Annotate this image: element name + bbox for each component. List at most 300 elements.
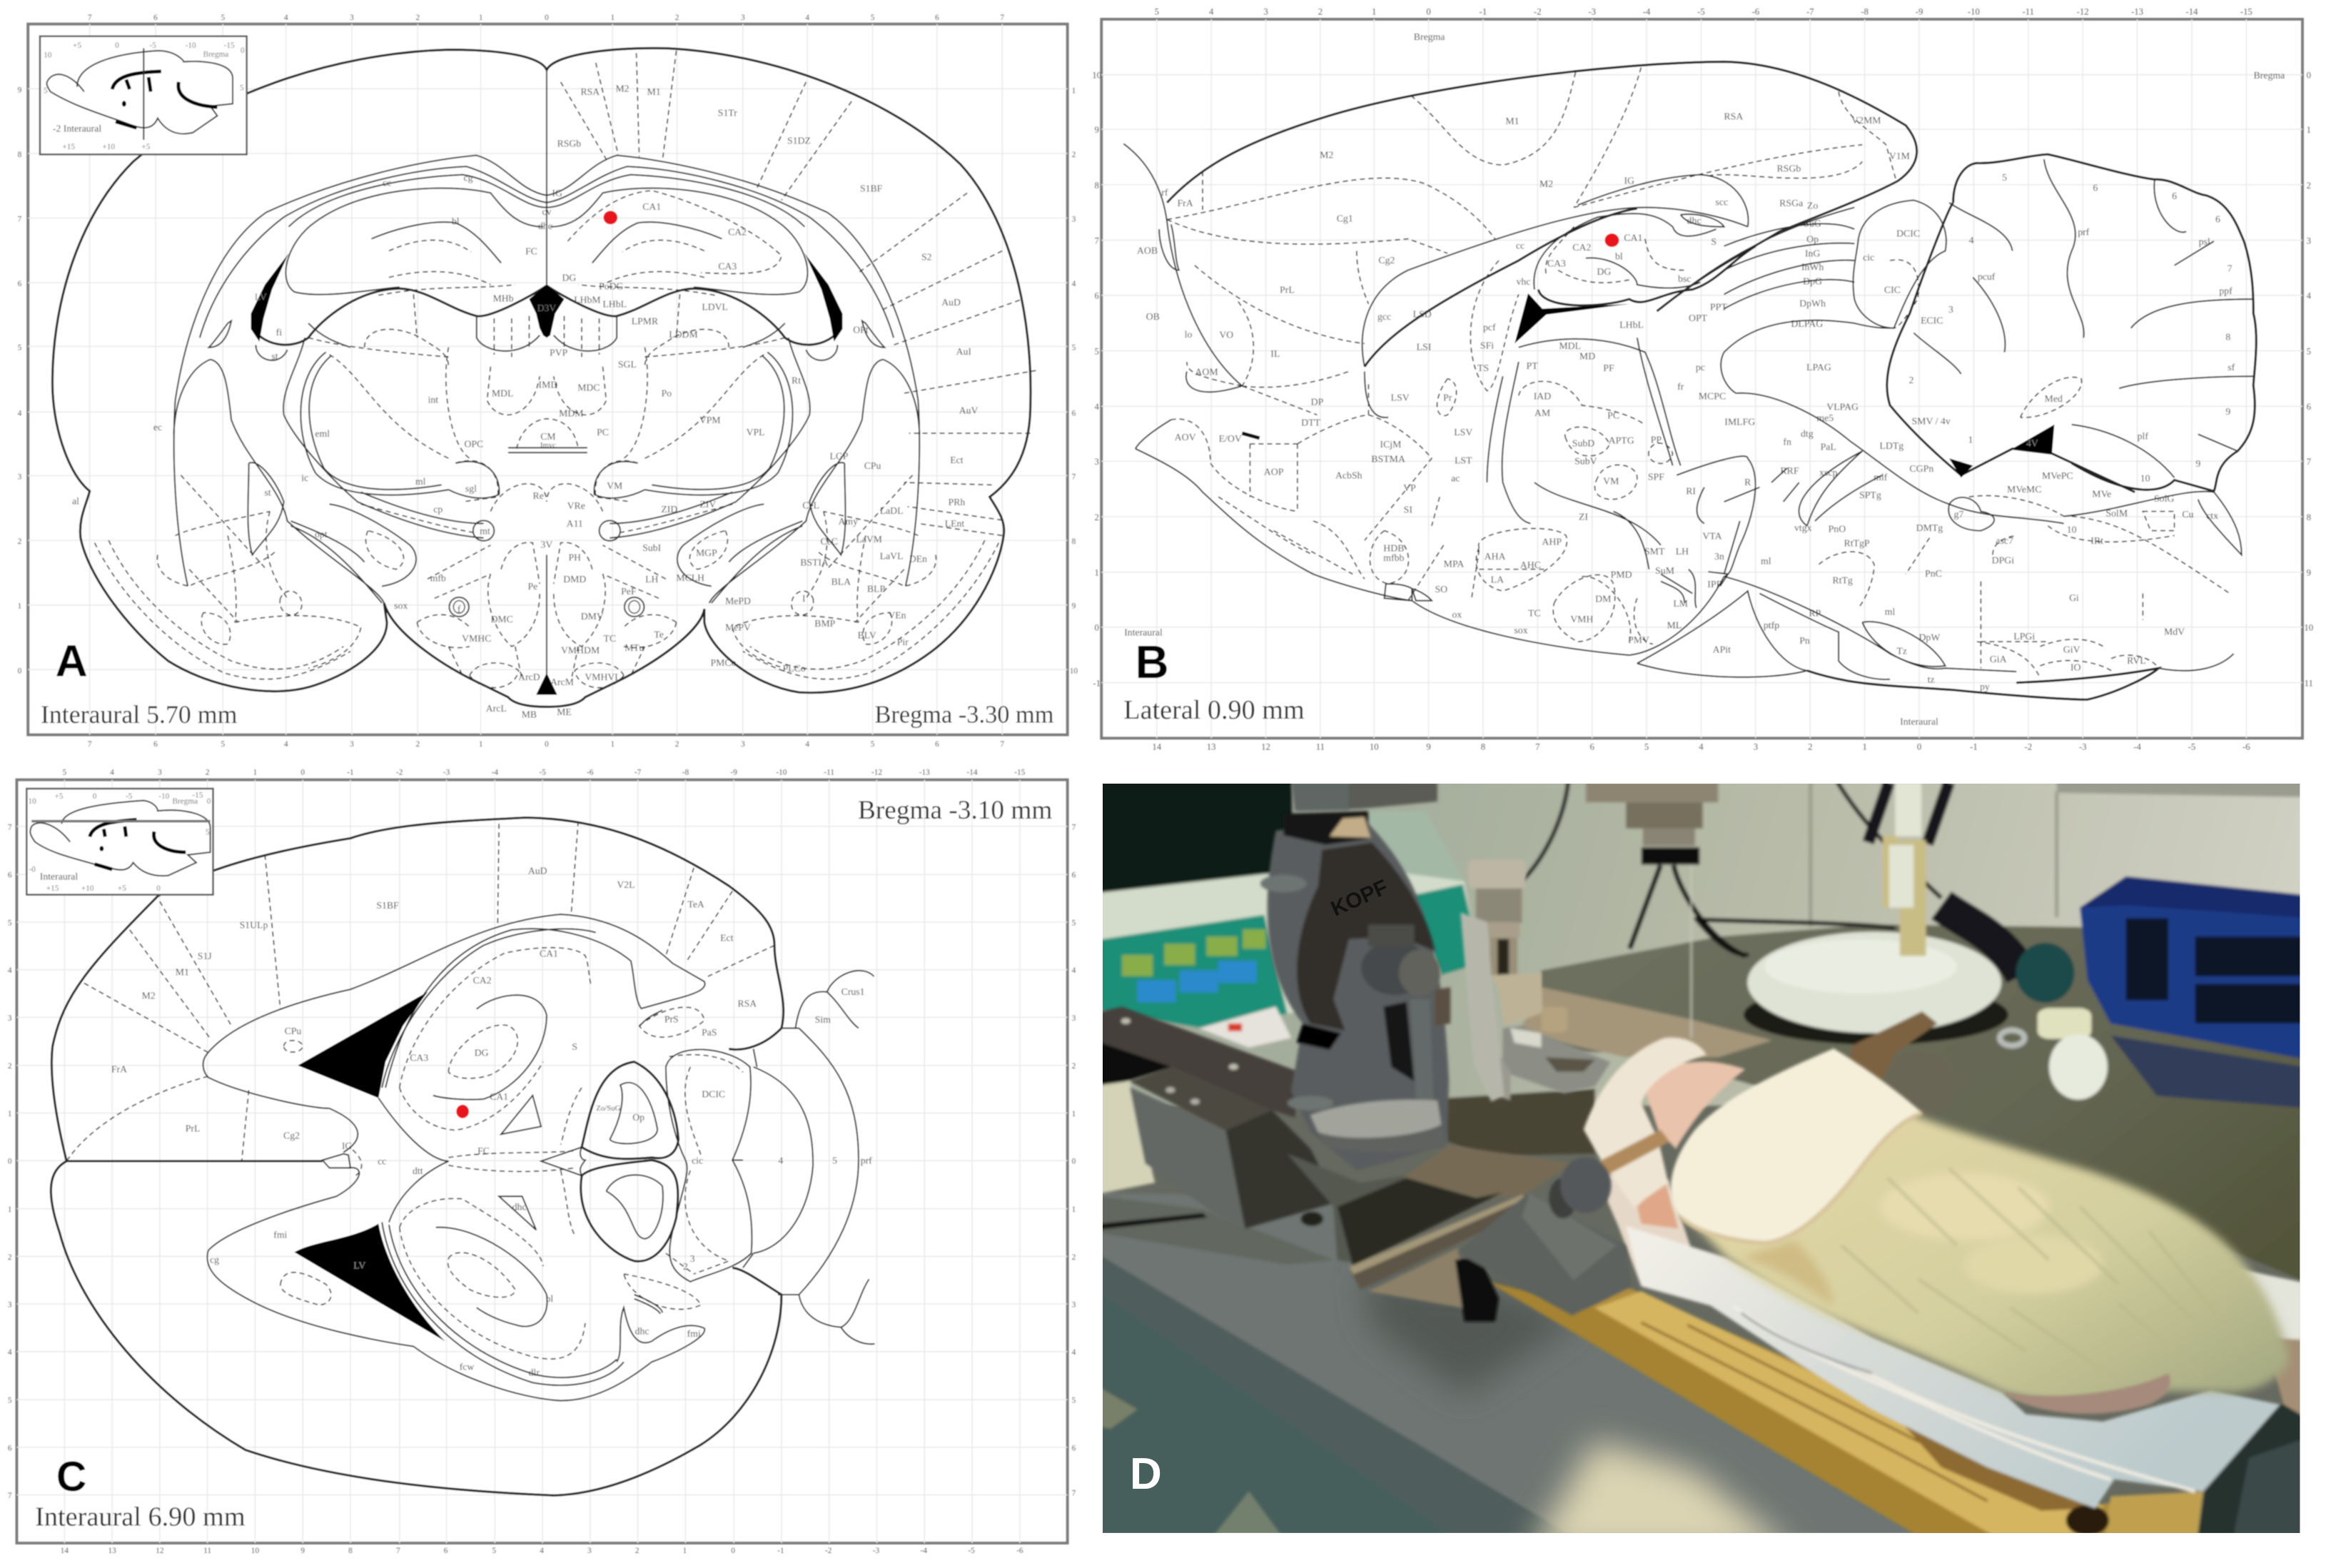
structure labels B [1124,31,2285,727]
panel B axis numbers [1092,6,2313,752]
inset: sagittal locator A: +5 [73,41,81,50]
structure labels C: IG [342,1140,352,1151]
structure labels C: DCIC [702,1089,725,1100]
white tissue by head [1595,1173,1711,1305]
panel B axis numbers: 10 [1092,71,1101,81]
panel B axis numbers: 8 [1481,742,1485,752]
structure labels B: Med [2045,393,2063,404]
panel B axis numbers: -14 [2185,6,2198,16]
structure labels B: GiA [1990,654,2007,664]
bench surface [1534,924,2331,1294]
structure labels C: Crus1 [841,986,865,997]
structure labels B: V2MM [1851,115,1881,126]
panel C axis numbers: 5 [63,768,67,777]
structure labels B: DTT [1301,418,1321,428]
panel C axis numbers: 7 [8,1492,12,1500]
structure labels B: 3n [1714,551,1724,562]
structure labels A: VRe [567,500,585,511]
micrometer [1460,859,1567,1102]
panel C axis numbers: 2 [1072,1253,1076,1262]
structure labels C: Cg2 [283,1131,300,1141]
structure labels C: cic [692,1155,703,1165]
blue tube rack [2080,876,2331,1111]
structure labels A: S1Tr [718,107,737,118]
panel B axis numbers: 4 [2307,291,2312,301]
structure labels B: vhc [1516,276,1530,287]
panel C axis numbers: -12 [871,768,882,777]
structure labels A: MB [522,709,537,719]
table band [1087,1248,1603,1554]
structure labels A: cp [433,504,443,515]
inset: sagittal locator A: 0 [241,46,245,55]
structure labels B: RSA [1724,111,1743,121]
structure labels B: ECIC [1921,315,1943,325]
panel A axis numbers: 7 [88,14,92,22]
inset: sagittal locator A [40,36,247,154]
panel C axis numbers: 5 [8,1397,12,1405]
structure labels B: AcbSh [1335,470,1362,480]
panel B axis numbers: -2 [2024,742,2032,752]
panel C axis numbers: 9 [300,1547,305,1555]
structure labels A: PoDG [599,281,624,292]
structure labels B: AHC [1520,560,1541,570]
plate upper surface [1087,1195,1333,1265]
structure labels B: LDTg [1879,440,1903,451]
injection site marker A [604,211,617,224]
panel B axis numbers: 4 [1209,6,1214,16]
structure labels C: cg [210,1255,219,1265]
dorsal third ventricle [529,285,565,338]
panel B axis numbers: 6 [2307,402,2311,412]
central junction C [541,1147,585,1175]
panel B: sagittal atlas section [1092,6,2313,752]
panel B axis numbers: -1 [1480,6,1487,16]
inset: sagittal locator C: -5 [126,792,133,801]
structure labels B: AHP [1542,537,1562,547]
structure labels B: OB [1146,311,1160,322]
panel A axis numbers: 9 [1072,602,1076,611]
structure labels B: ac [1451,472,1460,483]
structure labels A: D3V [537,303,556,313]
panel A axis numbers: 4 [284,14,288,22]
panel A axis numbers: 0 [545,14,549,22]
structure labels A: FC [525,246,537,256]
panel C axis numbers: -1 [777,1547,784,1555]
panel A axis numbers: 7 [1072,473,1076,482]
panel A axis numbers: 10 [1070,667,1078,675]
panel C axis numbers: 3 [1072,1300,1076,1309]
structure labels B: DP [1311,397,1324,408]
structure labels B: 9 [2225,406,2230,417]
structure labels B: MD [1579,350,1595,361]
structure labels B: AHA [1485,551,1506,562]
panel A axis numbers: 3 [741,14,745,22]
panel B axis numbers: 9 [1094,125,1099,135]
structure labels B: DM [1595,593,1611,604]
structure labels B: IPF [1707,579,1722,590]
structure labels B: PnO [1829,523,1846,534]
structure labels A: Imvc [540,441,556,450]
colliculi C [581,1049,752,1282]
structure labels B: Gi [2069,592,2079,603]
panel B axis numbers: -5 [1697,6,1705,16]
panel C axis numbers: 2 [8,1253,12,1262]
panel A axis numbers: 7 [1000,740,1004,749]
panel C axis numbers: 6 [8,871,12,880]
glass dish and clamp arm [1849,1011,1953,1116]
structure labels C: Ect [720,933,734,944]
panel B axis numbers: 5 [1644,742,1649,752]
structure labels B: 2 [1908,375,1913,385]
structure labels B: IAD [1534,390,1551,401]
panel C axis numbers: 4 [8,966,12,975]
structure labels B: MCPC [1699,390,1726,401]
structure labels C: S1J [198,951,212,961]
structure labels C: PrS [664,1013,679,1024]
panel A axis numbers: 1 [18,602,21,611]
structure labels B: sox [1514,624,1528,635]
structure labels B: scc [1715,197,1728,208]
structure labels A: LGP [829,451,849,462]
structure labels A: OPt [853,324,869,335]
panel C axis numbers: -7 [634,768,642,777]
panel B axis numbers: -9 [1916,6,1923,16]
structure labels B: R [1744,477,1751,487]
structure labels A: DMD [563,574,586,585]
structure labels B: tz [1928,674,1935,684]
structure labels B: Interaural [1900,717,1938,727]
structure labels B: RRF [1780,465,1799,476]
structure labels B: LSD [1413,309,1432,320]
structure labels B: 3 [1948,304,1953,315]
panel B axis numbers: 5 [2307,346,2311,356]
structure labels B: ptfp [1764,620,1779,631]
structure labels B: DG [1597,266,1611,277]
structure labels A: Amy [838,516,858,527]
panel B axis numbers: 8 [2307,512,2311,522]
panel C axis numbers: 12 [156,1547,164,1555]
structure labels A: cc [383,177,391,188]
structure labels B: LSI [1417,341,1432,353]
structure labels B: CA2 [1572,242,1591,253]
ear bar rail [1087,1006,1299,1118]
inset: sagittal locator C: Interaural [40,871,78,881]
panel C axis numbers: 1 [8,1205,12,1214]
panel B axis numbers: -15 [2240,6,2252,16]
structure labels B: asc7 [1996,535,2013,546]
structure labels B: 6 [2215,213,2220,224]
structure labels B: APTG [1609,435,1634,446]
structure labels A: cv [542,206,552,217]
structure labels A: Pe [527,581,537,592]
structure labels B: 7 [2228,263,2233,273]
inset: sagittal locator A: 5 [240,84,244,93]
panel A axis numbers: 4 [284,740,288,749]
structure labels C: TeA [687,899,704,909]
structure labels A: ic [301,472,308,483]
structure labels A: f [457,604,461,614]
structure labels B: Cg2 [1378,255,1395,265]
structure labels A: CeL [802,500,819,511]
structure labels A: MHb [493,293,514,304]
cortical area boundaries B [1167,68,1896,415]
structure labels B: gcc [1377,311,1391,322]
structure labels A: Po [662,388,672,399]
structure labels C: prf [861,1155,872,1165]
structure labels B: MVePC [2042,470,2073,481]
structure labels A: RSGb [557,138,581,149]
cortical area boundaries C [84,821,774,1160]
structure labels A: bl [452,216,460,226]
panel C axis numbers: 3 [587,1547,592,1555]
inset: sagittal locator C: Bregma [172,797,198,806]
forebrain and cortex outline [1123,62,1917,655]
panel A axis numbers: 2 [675,740,679,749]
structure labels B: 4 [1969,235,1974,246]
structure labels C: PaS [702,1027,717,1038]
structure labels B: LSV [1391,392,1410,403]
structure labels A: ArcM [550,677,574,687]
gauze left of head [1584,1038,1706,1207]
structure labels A: VM [607,480,622,491]
structure labels B: xscp [1819,467,1837,477]
panel C axis numbers: -8 [682,768,689,777]
panel A axis numbers: 7 [88,740,92,749]
structure labels B: 9 [2195,458,2200,469]
structure labels A: BLA [831,576,851,587]
structure labels B: mlf [1874,472,1888,482]
panel B axis numbers: 1 [1094,568,1099,578]
structure labels A: ZIV [699,499,716,510]
structure labels B: 8 [2225,331,2230,342]
panel C axis numbers: 5 [8,919,12,927]
structure labels B: vtgx [1794,522,1812,533]
panel C axis numbers: -3 [873,1547,880,1555]
structure labels B: RSGb [1776,163,1801,173]
panel B axis numbers: 3 [1263,6,1268,16]
structure labels A: mt [480,525,490,536]
panel C axis numbers: -14 [967,768,978,777]
structure labels A: CPu [864,460,881,471]
panel C axis numbers: 7 [1072,823,1076,831]
wooden ear bar [1595,1130,1669,1175]
dark bench pit [1441,1088,1595,1156]
structure labels B: SMV / 4v [1911,416,1951,427]
structure labels A: ec [153,422,162,433]
structure labels C: S1ULp [240,919,268,930]
panel C axis numbers: -1 [347,768,354,777]
inset: sagittal locator A: 5 [44,87,48,96]
panel C axis numbers: 8 [348,1547,353,1555]
structure labels B: VMH [1570,614,1593,624]
structure labels A: CM [540,431,556,442]
structure labels B: g7 [1953,509,1963,520]
structure labels B: DpWh [1799,298,1826,309]
panel letter C: C [56,1454,86,1500]
structure labels C: dlr [529,1367,540,1378]
structure labels A: MDL [492,388,513,399]
structure labels A: cg [463,173,473,183]
panel C axis numbers: 2 [206,768,210,777]
panel C axis numbers: 0 [300,768,305,777]
inset: sagittal locator C: +15 [46,884,59,893]
structure labels B: InWh [1801,261,1824,272]
structure labels C: dhc [635,1326,649,1337]
structure labels B: RVL [2127,655,2146,666]
panel C axis numbers: 2 [1072,1062,1076,1071]
panel B axis numbers: -3 [1588,6,1596,16]
structure labels A: ZID [661,504,677,515]
inset: sagittal locator C: 5 [206,829,210,837]
panel C axis numbers: 7 [8,823,12,831]
panel C axis numbers [8,768,1076,1555]
structure labels A: IG [552,188,562,198]
structure labels A: RSA [580,86,600,97]
panel C axis numbers: 7 [396,1547,400,1555]
structure labels C: dhc [512,1202,527,1213]
post [1455,1258,1499,1322]
structure labels B: DpG [1803,276,1822,287]
structure labels C: V2L [617,879,635,890]
inset: sagittal locator C: -15 [192,791,203,799]
tan bench [1518,987,1772,1057]
injection site marker B [1604,233,1619,247]
structure labels B: plf [2138,431,2148,442]
structure labels A: ME [557,707,572,717]
structure labels B: 1 [1968,434,1973,445]
structure labels B: S [1711,236,1716,247]
inset: sagittal locator A: 0 [115,41,119,50]
structure labels B: PC [1607,410,1619,420]
inset: sagittal locator A: -2 Interaural [53,123,101,134]
inset: sagittal locator A: +10 [102,143,115,151]
structure labels C: M1 [176,966,189,977]
structure labels B: SI [1404,504,1412,515]
panel B axis numbers: 10 [2304,623,2313,633]
structure labels A: int [428,395,438,405]
bench right corner [2195,1405,2331,1554]
cerebellum outline [1887,154,2256,492]
central medial capsule lines [508,447,587,452]
panel B axis numbers: 9 [1426,742,1431,752]
panel A axis numbers: 4 [805,740,809,749]
paper towels [1626,1226,2331,1508]
structure labels B: RI [1686,486,1696,497]
hypothalamic and thalamic structures B [1171,261,1799,644]
structure labels B: PPT [1710,301,1727,312]
panel A axis numbers: 0 [18,667,22,675]
structure labels B: PMV [1628,634,1649,645]
panel B axis numbers: 11 [1316,742,1325,752]
panel C axis numbers: 3 [8,1300,12,1309]
structure labels B: rf [1161,187,1168,198]
panel A axis numbers: 3 [350,14,354,22]
panel A axis numbers: 1 [1072,87,1076,96]
panel C axis numbers: 4 [8,1348,12,1357]
structure labels B: APit [1713,644,1731,654]
panel A axis numbers: 1 [610,14,615,22]
panel letter B: B [1136,636,1169,688]
panel C axis numbers: 1 [683,1547,687,1555]
panel B axis numbers: -11 [2023,6,2034,16]
panel C axis numbers: 1 [253,768,257,777]
panel A axis numbers: 6 [153,740,158,749]
structure labels C: dtt [413,1165,423,1176]
caption: Bregma -3.30 mm: Bregma -3.30 mm [875,702,1054,729]
midline [546,70,547,675]
structure labels B: VP [1403,482,1416,493]
structure labels A: DG [562,272,576,283]
structure labels B: ml [1885,607,1896,617]
structure labels A: MDC [577,383,600,393]
structure labels A: opt [315,529,328,540]
structure labels B: 10 [2140,472,2150,483]
structure labels C: Op [632,1112,644,1123]
panel letter D: D [1130,1450,1162,1499]
panel C axis numbers: 5 [1072,1397,1076,1405]
structure labels C: CA1 [540,948,558,958]
structure labels A: Te [654,629,664,640]
structure labels B: VM [1603,475,1619,486]
panel B axis numbers: -4 [2133,742,2141,752]
panel C axis numbers: 2 [8,1062,12,1071]
structure labels B: CGPn [1909,463,1933,474]
structure labels B: DLPAG [1791,318,1823,329]
panel C axis numbers: 10 [251,1547,259,1555]
structure labels B: SPTg [1859,490,1881,500]
panel B axis numbers: 0 [2307,71,2311,81]
panel B axis numbers: 2 [2307,181,2311,191]
structure labels A: PRh [949,497,965,507]
structure labels B: RSGa [1779,198,1803,208]
panel B axis numbers: 6 [1094,291,1099,301]
structure labels A: MCLH [676,572,704,583]
structure labels A: VMHDM [561,644,600,655]
inset: sagittal locator A: +5 [141,143,151,151]
structure labels B: 6 [2093,182,2098,193]
structure labels B: SMT [1644,546,1665,557]
structure labels B: pc [1696,362,1705,373]
hippocampus B [1534,213,1756,305]
structure labels C: FrA [111,1064,127,1075]
base plate [1087,1193,1964,1554]
panel B axis numbers: 9 [2307,568,2311,578]
panel B axis numbers: -5 [2188,742,2195,752]
structure labels C: FC [477,1145,490,1156]
left hemisphere internal structures [95,156,547,688]
structure labels A: TC [604,633,616,644]
structure labels A: LDVL [702,302,728,313]
hippocampus lower C [382,1170,624,1385]
lower table [1087,1284,1480,1554]
tectum and colliculi [1661,201,1949,504]
structure labels B: M1 [1505,116,1520,126]
panel D: photograph of rat in stereotaxic frame [1103,784,2300,1533]
panel A axis numbers: 9 [18,86,22,94]
structure labels A: S2 [921,251,932,262]
panel C axis numbers: -3 [443,768,450,777]
injection site marker C [456,1105,469,1118]
structure labels C: CA3 [410,1053,428,1063]
structure labels B: RtTg [1832,575,1853,586]
structure labels B: BSTMA [1371,453,1405,464]
wall [1080,768,2326,1106]
structure labels B: sf [2228,362,2235,373]
mint wall behind tower [1370,812,1436,874]
structure labels A: IMD [539,380,557,390]
structure labels A: S1DZ [787,135,811,146]
structure labels B: ML [1667,620,1682,631]
